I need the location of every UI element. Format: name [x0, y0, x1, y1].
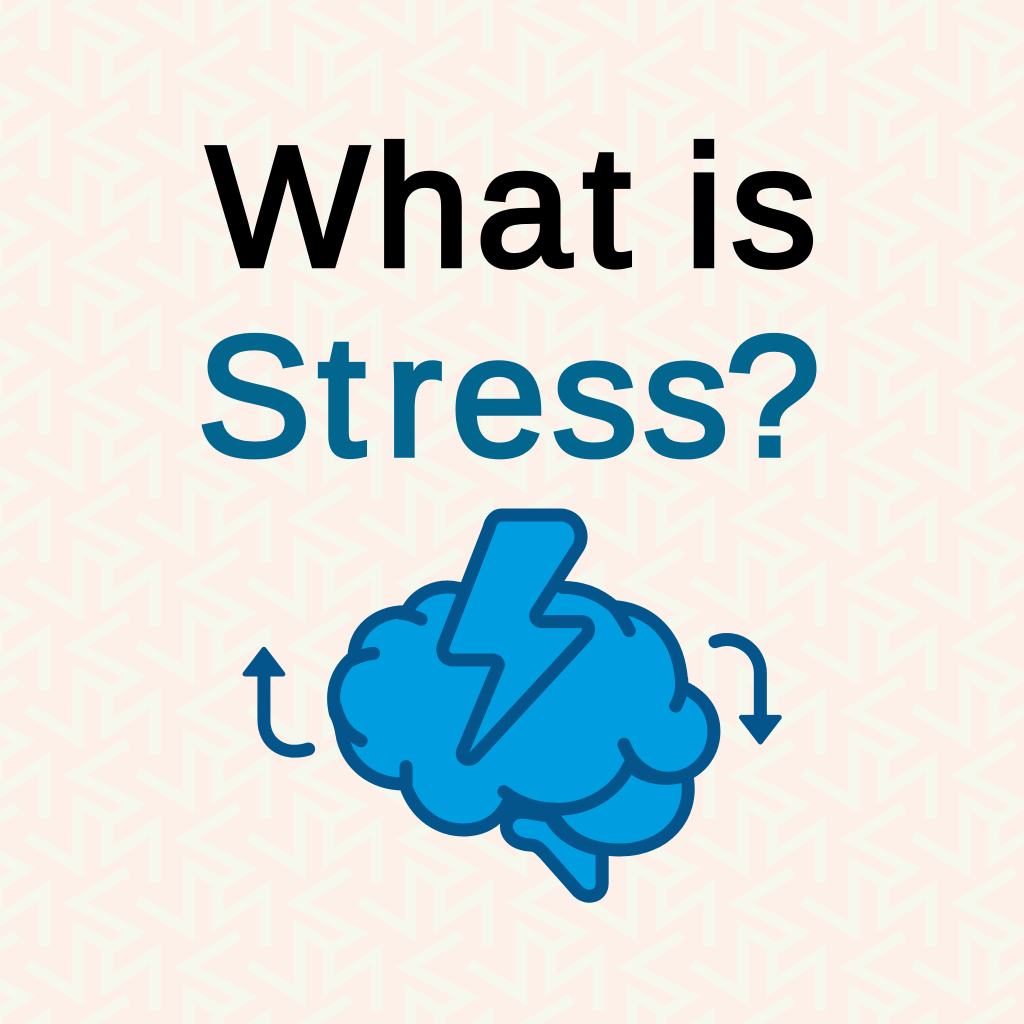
- arrow: left upward: [245, 649, 309, 751]
- title: What is: What is: [207, 112, 816, 302]
- brain stem: [506, 812, 602, 896]
- brain folds: [335, 607, 682, 809]
- heading: Stress?: Stress?: [197, 301, 820, 492]
- arrow: right downward: [715, 639, 779, 742]
- brain outline: [334, 587, 714, 830]
- cerebellum: [551, 760, 688, 850]
- icon: stressed brain with lightning bolt: [245, 515, 779, 896]
- lightning bolt: [443, 515, 588, 759]
